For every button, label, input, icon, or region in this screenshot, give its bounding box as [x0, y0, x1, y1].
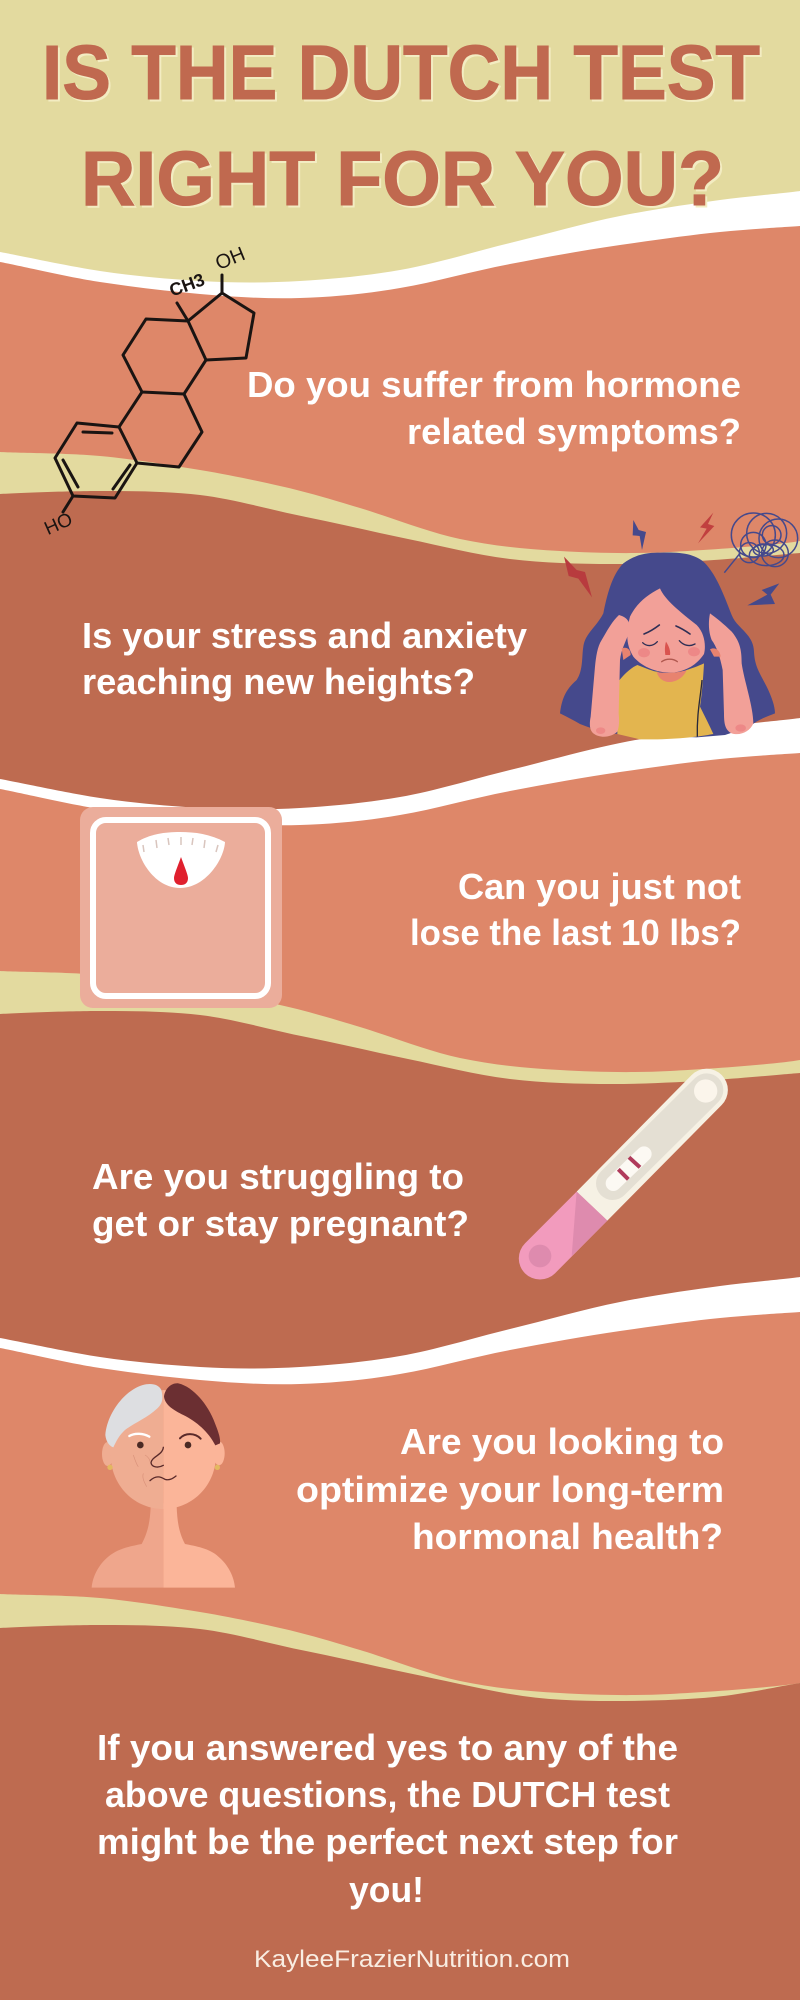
- head, younger side: [163, 1390, 216, 1509]
- result window: [613, 1154, 644, 1183]
- text: weight loss question: lose the last 10 lbs?: [410, 912, 741, 953]
- text: closing call to action: might be the perfect next step for: [97, 1821, 678, 1862]
- result lines: [618, 1157, 640, 1179]
- text: hormone symptoms question: [247, 364, 741, 452]
- icon: bathroom scale: [80, 807, 282, 1008]
- cheeks and elbows: [596, 647, 746, 734]
- text: hormone symptoms question: related symptoms?: [407, 411, 741, 452]
- icon: hormone molecule: HO: [41, 509, 76, 540]
- test body: [577, 1069, 728, 1221]
- neck: [657, 670, 687, 682]
- text: weight loss question: [410, 866, 741, 953]
- text: stress and anxiety question: [82, 615, 527, 702]
- title: IS THE DUTCH TEST: [42, 30, 760, 116]
- scale dial: [137, 832, 225, 888]
- text: long-term health question: hormonal health?: [412, 1516, 723, 1557]
- head, older side: [111, 1390, 163, 1509]
- ears: [622, 648, 721, 660]
- ears: [102, 1442, 113, 1466]
- text: hormone symptoms question: Do you suffer from hormone: [247, 364, 741, 405]
- shoulders and neck, older side: [92, 1503, 163, 1588]
- title: RIGHT FOR YOU?: [81, 136, 724, 222]
- yellow shirt: [617, 663, 713, 739]
- top circle: [694, 1079, 717, 1103]
- cord: [697, 680, 702, 737]
- footer website: KayleeFrazierNutrition.com: [254, 1946, 570, 1973]
- earrings: [107, 1465, 113, 1470]
- nose and mouth: [151, 1447, 163, 1467]
- eyes: [137, 1442, 144, 1448]
- eyes, brows and mouth: [643, 625, 695, 662]
- icon: hormone molecule: [41, 243, 254, 540]
- stress bolts: [633, 520, 646, 550]
- text: closing call to action: you!: [349, 1869, 424, 1910]
- text: weight loss question: Can you just not: [458, 866, 741, 907]
- grey panel: [613, 1090, 707, 1183]
- icon: hormone molecule: CH3: [167, 269, 207, 301]
- title: [42, 30, 760, 222]
- text: long-term health question: Are you looking to: [400, 1421, 724, 1462]
- text: stress and anxiety question: reaching new heights?: [82, 661, 475, 702]
- text: stress and anxiety question: Is your stress and anxiety: [82, 615, 527, 656]
- icon: pregnancy test: [519, 1069, 728, 1280]
- text: pregnancy question: get or stay pregnant?: [92, 1203, 469, 1244]
- wrinkles: [133, 1455, 150, 1487]
- text: long-term health question: optimize your long-term: [296, 1469, 724, 1510]
- text: pregnancy question: Are you struggling to: [92, 1156, 464, 1197]
- text: closing call to action: above questions, the DUTCH test: [105, 1774, 670, 1815]
- hair: [560, 553, 775, 737]
- text: closing call to action: [97, 1727, 678, 1910]
- shoulders and neck, younger side: [163, 1503, 235, 1588]
- text: long-term health question: [296, 1421, 724, 1557]
- pink handle: [519, 1192, 607, 1280]
- text: closing call to action: If you answered yes to any of the: [97, 1727, 678, 1768]
- arms: [590, 615, 630, 737]
- dark hair: [164, 1383, 220, 1445]
- icon: half old half young face: [92, 1383, 235, 1588]
- tangled thought scribble: [724, 513, 798, 573]
- text: pregnancy question: [92, 1156, 469, 1244]
- grey hair: [105, 1384, 162, 1447]
- icon: hormone molecule: OH: [212, 243, 248, 275]
- scale needle: [174, 857, 188, 885]
- brows: [129, 1434, 149, 1437]
- face: [627, 588, 705, 673]
- icon: stressed woman: [560, 513, 798, 739]
- nose: [665, 642, 670, 655]
